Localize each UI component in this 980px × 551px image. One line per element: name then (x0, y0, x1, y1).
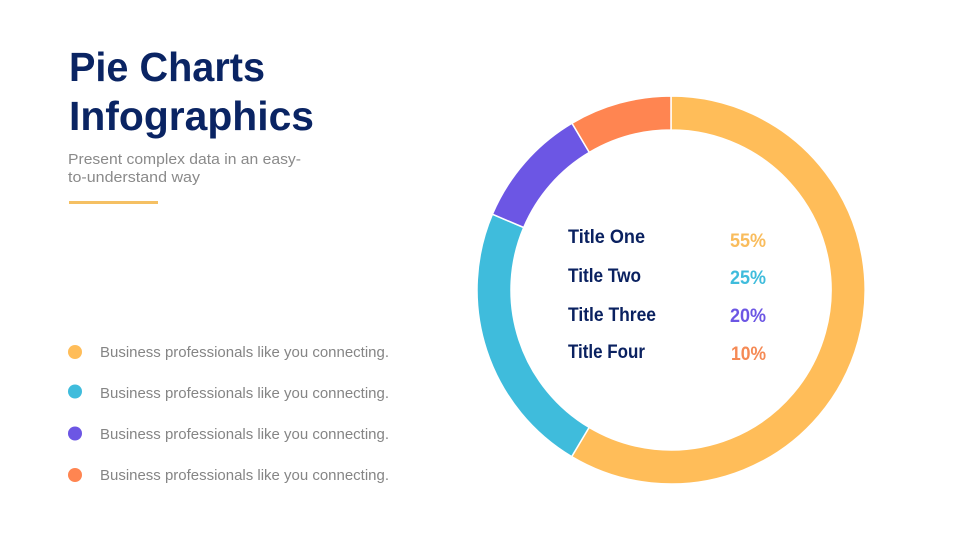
row: title two: Title Two (568, 266, 641, 287)
segment: purple (492, 123, 589, 228)
row: title two: 25% (730, 268, 766, 289)
segment: yellow (572, 96, 865, 484)
legend (68, 344, 389, 484)
row: title four: Title Four (568, 342, 646, 363)
row: title one: Title One (568, 227, 645, 248)
donut chart (477, 96, 865, 484)
segment: blue (477, 214, 589, 457)
subtitle: to-understand way (68, 169, 201, 186)
accent line (69, 201, 158, 204)
row: title four (568, 342, 766, 365)
title (69, 44, 314, 139)
legend item: purple: Business professionals like you connecting. (100, 426, 389, 443)
title: Pie Charts (69, 44, 265, 90)
row: title three: 20% (730, 306, 766, 327)
row: title three (568, 305, 766, 327)
legend item: orange: Business professionals like you connecting. (100, 467, 389, 484)
chart labels (568, 227, 766, 365)
row: title three: Title Three (568, 305, 656, 326)
row: title four: 10% (731, 344, 766, 365)
legend item: yellow: Business professionals like you connecting. (100, 344, 389, 361)
title: Infographics (69, 93, 314, 139)
segment: orange (572, 96, 671, 152)
row: title one (568, 227, 766, 252)
row: title two (568, 266, 766, 289)
subtitle (68, 151, 301, 186)
subtitle: Present complex data in an easy- (68, 151, 301, 168)
row: title one: 55% (730, 231, 766, 252)
legend item: blue: Business professionals like you connecting. (100, 385, 389, 402)
